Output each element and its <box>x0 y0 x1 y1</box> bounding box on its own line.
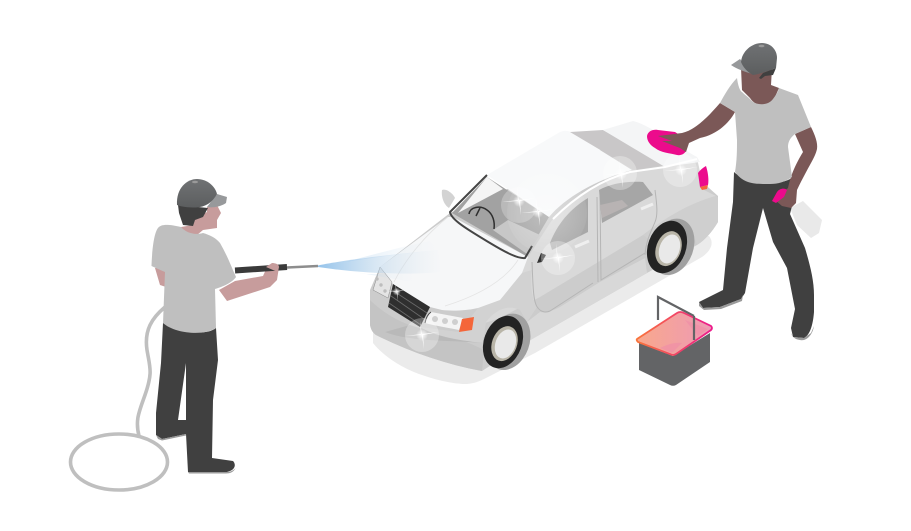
spray bottle <box>790 201 822 238</box>
basket body <box>639 333 710 386</box>
sparkles <box>385 153 698 352</box>
front side window <box>550 198 588 250</box>
hose <box>70 307 168 490</box>
far arm <box>155 266 166 287</box>
shirt <box>152 225 236 333</box>
steering wheel <box>469 207 494 229</box>
sill <box>527 258 647 342</box>
fender <box>420 270 537 343</box>
hair <box>178 205 208 226</box>
basket rim <box>637 312 712 355</box>
left mirror <box>442 190 455 208</box>
worker wiping car <box>647 43 822 340</box>
upper side panel <box>470 158 716 328</box>
side mirror <box>537 253 546 263</box>
indicator <box>459 317 474 332</box>
worker with pressure washer <box>152 179 318 474</box>
pants <box>699 172 814 338</box>
leg gap <box>178 363 186 420</box>
far arm <box>658 103 735 152</box>
roof edge highlight <box>553 159 697 219</box>
windshield glass <box>452 177 549 256</box>
hand <box>266 263 279 272</box>
water spray <box>318 241 442 282</box>
front wheel <box>476 306 538 376</box>
door handles <box>575 204 653 247</box>
roof <box>487 131 632 217</box>
bumper band <box>385 325 486 343</box>
face <box>741 68 779 105</box>
rag <box>647 130 687 155</box>
hair <box>759 68 776 79</box>
car body <box>370 150 718 371</box>
right headlight <box>425 312 463 330</box>
hood <box>380 217 528 311</box>
rear wheel <box>640 211 702 281</box>
near arm <box>775 127 817 208</box>
rear side window <box>599 182 653 223</box>
tail light <box>698 166 708 190</box>
left headlight <box>373 267 392 298</box>
shoe soles <box>156 434 236 474</box>
pressure gun <box>235 266 318 270</box>
near arm <box>219 265 279 301</box>
ground shadow <box>373 236 712 384</box>
basket inner shade <box>660 320 708 352</box>
pink spray handle <box>772 189 787 203</box>
rear window <box>570 130 665 170</box>
rear seat band <box>600 200 628 218</box>
rear quarter panel <box>643 196 718 245</box>
door seams <box>532 190 657 312</box>
pants <box>156 323 235 472</box>
hood crease <box>394 217 518 306</box>
shoe soles <box>699 295 814 340</box>
shirt <box>720 78 811 184</box>
wash basket <box>637 297 712 386</box>
cap <box>731 43 777 75</box>
windshield frame <box>450 175 532 258</box>
car <box>370 121 718 384</box>
bumper lower shade <box>370 300 484 371</box>
basket handle back <box>658 297 694 320</box>
neck and face <box>181 205 221 235</box>
dashboard <box>493 220 540 254</box>
basket handle front <box>693 316 695 340</box>
windshield reflection <box>458 177 503 213</box>
cap <box>177 179 227 208</box>
grille <box>388 284 430 327</box>
trunk <box>603 121 700 167</box>
